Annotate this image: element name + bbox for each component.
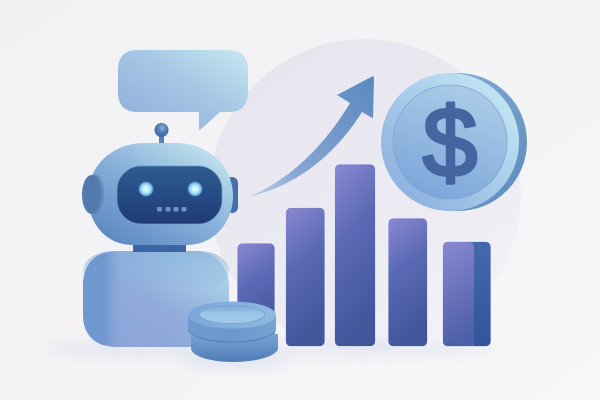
robot head (88, 143, 233, 245)
speech bubble (118, 50, 248, 130)
robot mouth (157, 207, 186, 212)
coin stack (188, 302, 278, 362)
coin face (381, 73, 519, 211)
dollar coin (381, 73, 527, 211)
bar 1 (237, 243, 275, 346)
background disc (209, 39, 521, 351)
robot neck (133, 243, 186, 252)
robot eyes (138, 181, 203, 197)
robot body (83, 251, 229, 347)
coin edge (389, 73, 527, 211)
robot face screen (117, 166, 222, 224)
growth arrow (248, 76, 374, 197)
ground shadow (45, 343, 495, 367)
bar chart (237, 164, 491, 346)
lower coin (191, 334, 278, 362)
robot (82, 123, 238, 347)
bar 2 (286, 208, 325, 346)
upper coin (188, 302, 276, 342)
bar 3 (334, 164, 376, 346)
bar 4 (388, 218, 428, 346)
robot antenna (154, 123, 168, 145)
bar 5 (442, 242, 491, 346)
dollar sign: $ (423, 87, 477, 197)
coin inner face (393, 85, 507, 199)
robot left ear (82, 174, 104, 214)
robot right ear (226, 177, 238, 213)
